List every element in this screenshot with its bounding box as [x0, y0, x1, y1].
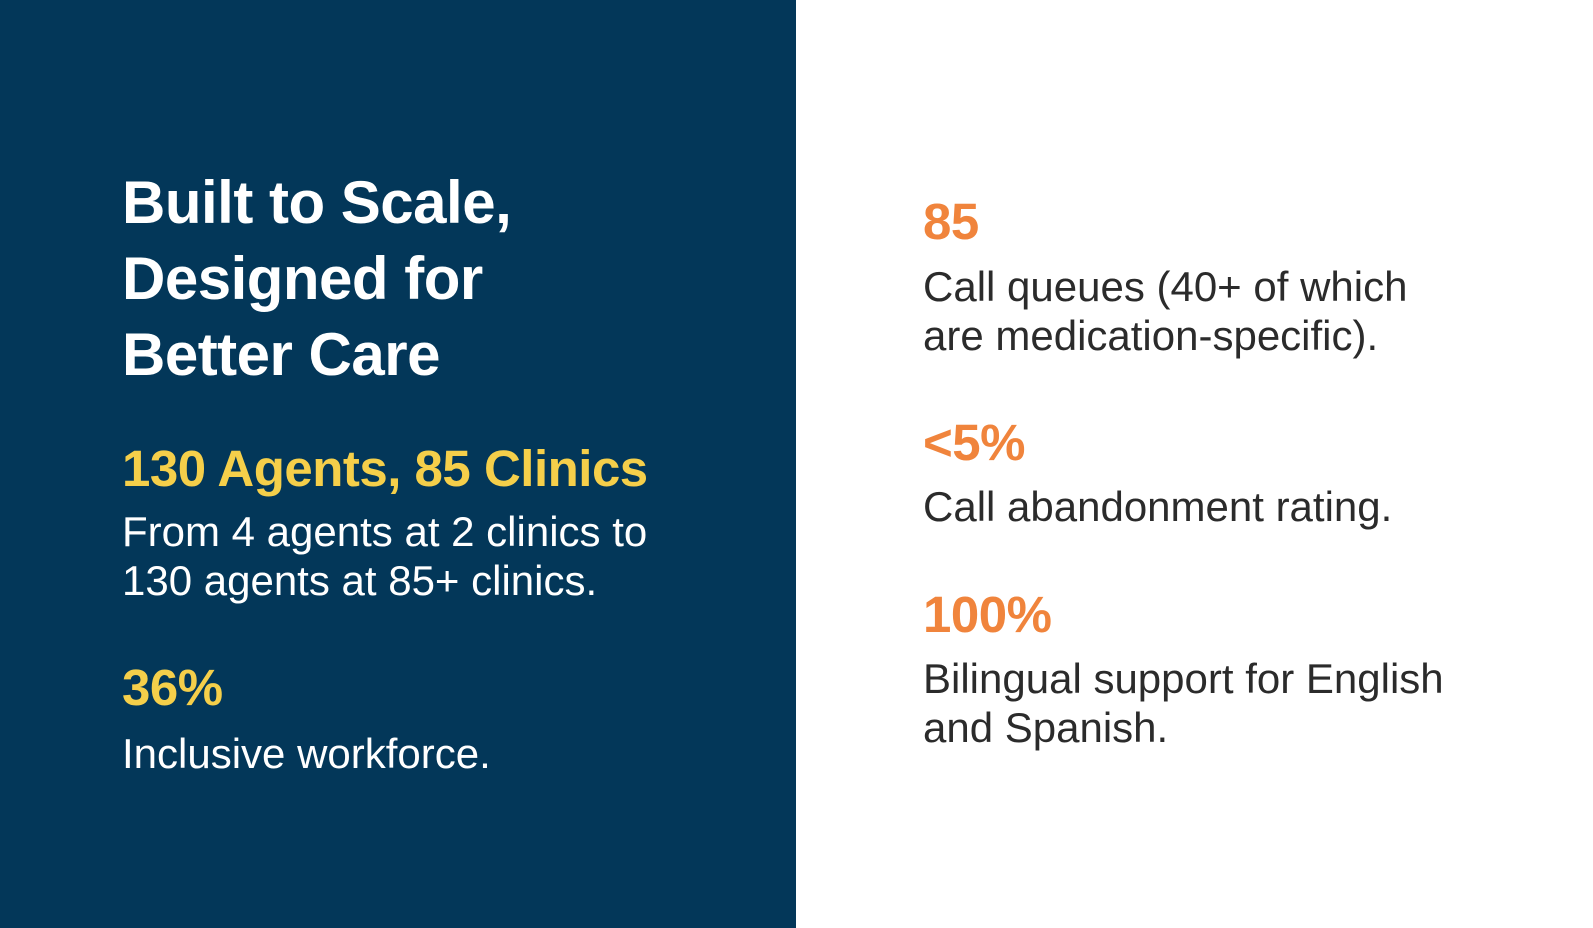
text: bilingual: and Spanish.: [923, 704, 1168, 751]
stat: 36%: 36%: [122, 659, 223, 716]
text: agents growth: From 4 agents at 2 clinics to: [122, 508, 647, 555]
title: Better Care: [122, 321, 440, 388]
text: abandonment: Call abandonment rating.: [923, 483, 1392, 530]
text: agents growth: 130 agents at 85+ clinics.: [122, 557, 597, 604]
text: agents growth: [122, 508, 647, 604]
text: call queues: are medication-specific).: [923, 312, 1378, 359]
title: Designed for: [122, 245, 483, 312]
text: inclusive workforce: Inclusive workforce.: [122, 730, 491, 777]
stat: agents and clinics heading: 130 Agents, 85 Clinics: [122, 440, 648, 497]
text: call queues: [923, 263, 1407, 359]
title: Built to Scale,: [122, 169, 511, 236]
stat: 85 call queues: 85: [923, 193, 979, 250]
title: [122, 169, 511, 388]
text: bilingual: Bilingual support for English: [923, 655, 1444, 702]
text: bilingual: [923, 655, 1444, 751]
stat: <5%: <5%: [923, 414, 1025, 471]
text: call queues: Call queues (40+ of which: [923, 263, 1407, 310]
panel: left navy: [0, 0, 796, 928]
stat: 100%: 100%: [923, 586, 1051, 643]
